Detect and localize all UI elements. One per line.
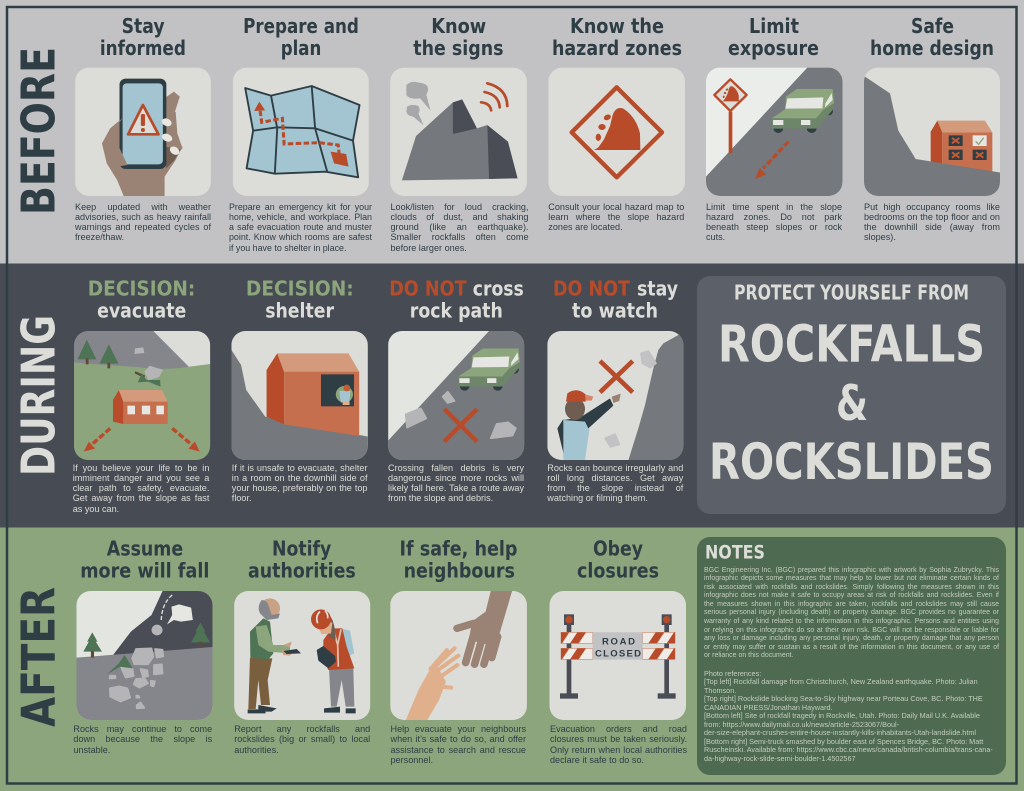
text: do not stay description: roll long distances. Get away [547,473,683,483]
text: prepare and plan description: point. Know which rooms are safest [229,232,372,242]
heading: DO NOT cross rock path [389,277,524,323]
heading: Stay informed: Stay [122,14,165,38]
text: assume more will fall description: unstable. [73,745,110,755]
text: safe home design description: bedrooms on the top floor and on [864,212,1000,222]
text: safe home design description: the downhill side (away from [864,222,1000,232]
text: limit exposure description [706,202,842,242]
text: help neighbours description [390,724,526,765]
heading: Assume more will fall: Assume [107,537,183,561]
text: notes disclaimer: risk associated with rockfalls and rockslides. Simply following the measures shown in this [704,584,999,591]
heading: Know the signs: Know [431,14,486,38]
text: know the signs description: ground (like an earthquake). [390,222,528,232]
text: evacuate description: Get away from the slope as fast [73,493,209,503]
text: photo references: Thomson. [704,686,736,695]
section label: DURING: DURING [11,315,65,476]
icon: resident reporting to field worker [225,590,372,722]
text: evacuate description: imminent danger and you see a [73,473,209,483]
heading: Safe home design: Safe [911,14,954,38]
text: notes disclaimer: or entity may suffer or sustain as a result of the information in this document, or any use of [704,644,999,651]
heading: Notify authorities [248,537,356,583]
text: hazard zones description: learn where the slope hazard [548,212,684,222]
text: know the signs description: clouds of dust, and shaking [390,212,528,222]
heading: Know the hazard zones: hazard zones [552,36,682,60]
icon: car on slope under hazard sign [706,68,843,196]
text: evacuate description: clear path to safety, evacuate. [73,483,209,493]
heading: DECISION evacuate: DECISION: [88,277,195,301]
text: hazard zones description: zones are located. [548,222,623,232]
text: obey closures description: closures must be taken seriously. [550,734,687,744]
text: shelter description: in a room on the downhill side of [232,473,367,483]
text: obey closures description: declare it safe to do so. [550,755,644,765]
icon: cracking mountain with dust clouds and sound waves [390,68,527,196]
heading: Stay informed: informed [100,36,186,60]
heading: Obey closures [577,537,659,583]
text: notes disclaimer [704,566,1000,659]
heading: DO NOT cross rock path: cross [473,277,524,301]
panel: notes background and title: NOTES [705,542,765,564]
text: stay informed description: warnings and repeated cycles of [75,222,211,232]
text: limit exposure description: Limit time spent in the slope [706,202,842,212]
text: limit exposure description: beneath steep slopes or rock [706,222,842,232]
text: notes disclaimer: the measures shown in this infographic are taken, rockfalls and rockslides may still cause [704,601,999,608]
icon: road closed barricade: CLOSED [595,648,641,660]
heading: Safe home design: home design [870,36,994,60]
text: know the signs description: Smaller rockfalls often come [390,232,528,242]
text: obey closures description: Evacuation orders and road [550,724,687,734]
text: prepare and plan description: home, vehicle, and workplace. Plan [229,212,372,222]
text: hazard zones description [548,202,684,232]
text: safe home design description [864,202,1000,242]
heading: Know the signs [413,14,504,60]
text: shelter description: your house, preferably on the top [232,483,367,493]
heading: Know the hazard zones: Know the [570,14,664,38]
text: notes disclaimer: warranty of any kind related to the information in this infographic. Persons and entities using [704,618,999,625]
heading: Know the hazard zones [552,14,682,60]
text: assume more will fall description: Rocks may continue to come [73,724,212,734]
text: shelter description: floor. [232,493,252,503]
icon: adult hand reaching for child hand [390,591,527,720]
icon: rockfall hazard diamond sign [548,68,685,196]
heading: Notify authorities: authorities [248,559,356,583]
heading: DO NOT cross rock path: DO NOT [389,277,467,301]
text: safe home design description: Put high occupancy rooms like [864,202,1000,212]
text: hazard zones description: Consult your local hazard map to [548,202,684,212]
text: help neighbours description: assistance to search and rescue [390,745,526,755]
text: evacuate description: If you believe your life to be in [73,462,209,472]
icon: folded evacuation map with route [233,68,369,196]
panel: during section background [0,264,1024,528]
text: know the signs description: Look/listen for loud cracking, [390,202,528,212]
icon: house on downhill side of slope [864,68,1001,197]
text: notify authorities description [234,724,370,755]
heading: Prepare and plan [243,14,359,60]
text: notes disclaimer: infographic depicts some measures that may help to lower but not eliminate certain kinds of [704,575,999,582]
text: obey closures description [550,724,687,765]
text: assume more will fall description [73,724,212,755]
text: photo references: da-highway-rock-slide-semi-boulder-1.4502567 [704,754,856,763]
heading: Obey closures: Obey [593,537,643,561]
text: photo references: [Top right] Rockslide blocking Sea-to-Sky highway near Porteau Cove, BC. Photo: THE [704,694,983,703]
icon: rock pile below unstable slope [76,591,213,720]
heading: Assume more will fall [80,537,209,583]
heading: Limit exposure: Limit [749,14,799,38]
heading: Safe home design [870,14,994,60]
text: do not cross description: Crossing fallen debris is very [388,462,524,472]
text: photo references: from: https://www.dailymail.co.uk/news/article-2523067/Boul- [704,720,899,729]
text: prepare and plan description: if you have to shelter in place. [229,243,346,253]
text: photo references: Ruscheinski. Available from: https://www.cbc.ca/news/canada/british-columbia/trans-cana- [704,745,993,754]
text: prepare and plan description: a safe evacuation route and muster [229,222,372,232]
heading: DECISION shelter: shelter [265,299,334,323]
text: do not cross description: likely fall here. Take a route away [388,483,524,493]
text: prepare and plan description: Prepare an emergency kit for your [229,202,372,212]
icon: house on hillside with evacuation arrows [74,331,211,460]
heading: If safe, help neighbours: neighbours [404,559,515,583]
text: notes disclaimer: any loss or damage including any personal injury, death, or property damage that any person [704,635,999,642]
text: assume more will fall description: down because the slope is [73,734,212,744]
heading: Limit exposure: exposure [728,36,819,60]
text: stay informed description: advisories, such as heavy rainfall [75,212,211,222]
panel: poster title [697,276,1006,514]
text: limit exposure description: hazard zones. Do not park [706,212,842,222]
icon: phone with warning held in hand [75,68,211,197]
text: obey closures description: Only return when local authorities [550,745,687,755]
text: prepare and plan description [229,202,372,253]
heading: DO NOT stay to watch [553,277,678,323]
heading: If safe, help neighbours: If safe, help [400,537,518,561]
icon: sheltering in house room on downhill side [231,331,368,460]
text: do not stay description: watching or filming them. [547,493,648,503]
text: notes disclaimer: or reliance on this document. [704,652,793,659]
text: photo references: [Bottom right] Semi-truck smashed by boulder east of Spences Bridge, BC. Photo: Matt [704,737,983,746]
text: shelter description: If it is unsafe to evacuate, shelter [232,462,367,472]
text: evacuate description: as you can. [73,504,119,514]
heading: Stay informed [100,14,186,60]
heading: Obey closures: closures [577,559,659,583]
heading: If safe, help neighbours [400,537,518,583]
text: stay informed description [75,202,212,242]
text: stay informed description: freeze/thaw. [75,232,124,242]
heading: DECISION evacuate: evacuate [97,299,186,323]
text: notify authorities description: rockslides (big or small) to local [234,734,370,744]
text: do not cross description: dangerous since more rocks will [388,473,524,483]
text: do not stay description: from the slope instead of [547,483,683,493]
heading: Notify authorities: Notify [272,537,331,561]
heading: DO NOT cross rock path: rock path [410,299,503,323]
text: photo references: der-size-elephant-crushes-entire-house-instantly-kills-inhabitants-Utah-landslide.html [704,728,976,737]
text: notify authorities description: Report any rockfalls and [234,724,370,734]
heading: DECISION shelter: DECISION: [246,277,354,301]
text: notes disclaimer: serious personal injury (including death) or property damage. BGC provides no guarantee or [704,609,999,616]
text: notes disclaimer: or relying on this infographic do so at their own risk. BGC will not be responsible or liable for [704,627,999,634]
heading: Prepare and plan: Prepare and [243,14,359,38]
panel: poster title: & [836,375,868,432]
text: do not stay description [547,462,684,503]
heading: DO NOT stay to watch: to watch [572,299,658,323]
section label: BEFORE: BEFORE [11,47,65,215]
panel: notes background and title [697,537,1006,775]
text: photo references: [Bottom left] Site of rockfall tragedy in Rockville, Utah. Photo: Daily Mail U.K. Available [704,711,980,720]
text: photo references: CANADIAN PRESS/Jonathan Hayward. [704,703,833,712]
text: do not cross description [388,462,524,503]
text: photo references: [Top left] Rockfall damage from Christchurch, New Zealand earthquake. Photo: Julian [704,677,978,686]
text: help neighbours description: Help evacuate your neighbours [390,724,526,734]
text: limit exposure description: cuts. [706,232,725,242]
text: help neighbours description: personnel. [390,755,433,765]
text: do not stay description: Rocks can bounce irregularly and [547,462,683,472]
panel: after section background [0,528,1024,791]
heading: DECISION shelter [246,277,354,323]
heading: Limit exposure [728,14,819,60]
text: do not cross description: from the slope and debris. [388,493,493,503]
text: stay informed description: Keep updated with weather [75,202,211,212]
icon: road closed barricade [549,591,686,720]
heading: Assume more will fall: more will fall [80,559,209,583]
heading: Know the signs: the signs [413,36,504,60]
text: evacuate description [73,462,210,514]
heading: DO NOT stay to watch: stay [637,277,678,301]
icon: car crossing debris with red X [388,331,525,460]
text: safe home design description: slopes). [864,232,896,242]
text: photo references [704,668,993,763]
text: help neighbours description: when it’s safe to do so, and offer [390,734,526,744]
section label: AFTER: AFTER [11,587,65,727]
text: know the signs description [390,202,528,253]
heading: DECISION evacuate [88,277,195,323]
text: notes disclaimer: infographic does not make it safe to occupy areas at risk of rockfalls and rockslides. Even if [704,592,999,599]
text: know the signs description: before larger ones. [390,243,467,253]
icon: road closed barricade: ROAD [602,636,635,648]
heading: Prepare and plan: plan [281,36,321,60]
text: shelter description [232,462,368,503]
text: photo references: Photo references: [704,668,761,678]
panel: before section background [0,0,1024,264]
icon: person pointing at falling rocks with red X [547,331,684,460]
text: notify authorities description: authorities. [234,745,279,755]
text: notes disclaimer: BGC Engineering Inc. (BGC) prepared this infographic with artwork by Sophia Zubrycky. This [704,567,999,574]
heading: DO NOT stay to watch: DO NOT [553,277,630,301]
